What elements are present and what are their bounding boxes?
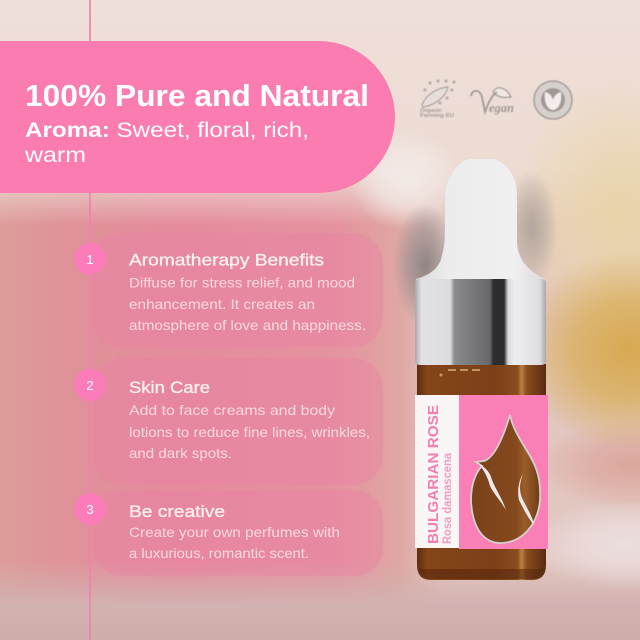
step 1 number badge: 1 — [86, 252, 94, 267]
step 2 text: Skin Care — [129, 378, 210, 397]
step 3 text — [129, 502, 340, 561]
step 1 text: atmosphere of love and happiness. — [129, 317, 366, 333]
step 2 text: and dark spots. — [129, 445, 232, 461]
panel: step 1 translucent card — [92, 233, 383, 347]
aroma line continuation: warm — [24, 143, 86, 167]
icon: EU organic leaf: Farming EU — [420, 113, 454, 119]
icon: cruelty-free bunny seal — [534, 81, 572, 119]
aroma line: Aroma: Sweet, floral, rich, — [25, 118, 309, 142]
step 3 text: Create your own perfumes with — [129, 524, 340, 540]
panel: step 2 translucent card — [93, 358, 383, 485]
step 3 text: a luxurious, romantic scent. — [129, 545, 309, 561]
icon: EU organic leaf: Organic — [420, 108, 442, 114]
step 1 text: enhancement. It creates an — [129, 296, 315, 312]
bottle — [415, 159, 548, 580]
header banner — [0, 41, 395, 193]
panel: step 3 translucent card — [93, 490, 383, 576]
icon: EU organic leaf — [420, 80, 456, 119]
icon: vegan mark — [471, 88, 514, 115]
bottle: white rubber dropper bulb — [416, 159, 545, 281]
step 1 text — [129, 250, 366, 333]
label: white strip with product name: BULGARIAN ROSE — [426, 405, 442, 544]
vertical timeline line — [89, 0, 91, 640]
step 3 text: Be creative — [129, 502, 225, 521]
label: pink panel — [459, 395, 548, 549]
step 2 text — [129, 378, 370, 461]
step 2 number badge — [74, 369, 106, 401]
bottle: dark base of the glass — [419, 565, 544, 579]
step 2 number badge: 2 — [86, 378, 94, 393]
step 2 text: Add to face creams and body — [129, 402, 335, 418]
bottle: silver collar — [415, 279, 546, 365]
icon: rose oil drop — [471, 415, 540, 543]
step 3 number badge — [74, 493, 106, 525]
title: 100% Pure and Natural — [25, 78, 369, 113]
bottle: amber glass body — [417, 364, 546, 580]
step 1 number badge — [74, 243, 106, 275]
label: white strip with product name — [415, 395, 459, 548]
step 1 text: Aromatherapy Benefits — [129, 250, 324, 270]
icon: vegan mark: egan — [489, 100, 514, 115]
bottle: glass rim highlights — [440, 369, 480, 376]
label: white strip with product name: Rosa damascena — [442, 452, 454, 544]
step 2 text: lotions to reduce fine lines, wrinkles, — [129, 424, 370, 440]
step 1 text: Diffuse for stress relief, and mood — [129, 274, 355, 290]
step 3 number badge: 3 — [86, 502, 94, 517]
